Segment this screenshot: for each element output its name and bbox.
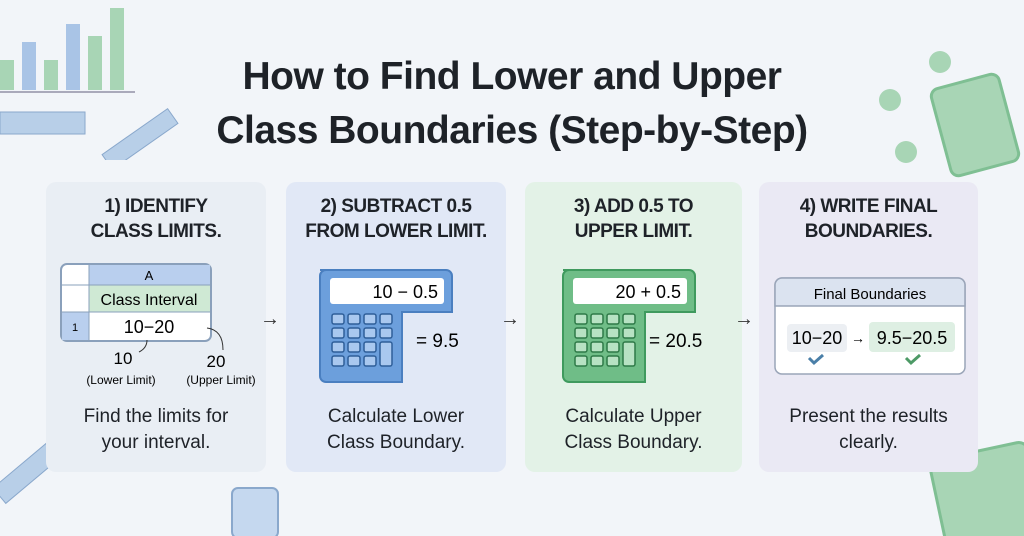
spreadsheet: class interval: Class Interval — [101, 292, 197, 309]
description step 4: Present the results — [789, 406, 948, 427]
calculator: 10 - 0.5: = 9.5 — [416, 331, 459, 352]
heading step 4 — [800, 196, 938, 242]
heading step 2: 2) SUBTRACT 0.5 — [321, 196, 471, 217]
spreadsheet: class interval: (Upper Limit) — [186, 373, 256, 387]
arrow 3: → — [734, 308, 754, 330]
final boundaries card — [774, 277, 966, 375]
heading step 4: 4) WRITE FINAL — [800, 196, 937, 217]
arrow 2: → — [500, 308, 520, 330]
decoration: bottom-left ruler and calculator — [0, 443, 279, 536]
calculator: 20 + 0.5 — [562, 269, 702, 383]
spreadsheet: class interval: 10−20 — [124, 317, 174, 337]
title: How to Find Lower and Upper — [242, 55, 781, 98]
calculator: 10 - 0.5: 10 − 0.5 — [372, 282, 438, 302]
heading step 2: FROM LOWER LIMIT. — [305, 221, 487, 242]
description step 2: Class Boundary. — [327, 432, 465, 453]
decoration: bar chart top-left — [0, 8, 135, 93]
final boundaries card: → — [851, 330, 865, 346]
final boundaries card: Final Boundaries — [814, 286, 926, 303]
panel: step 2 — [286, 182, 506, 472]
panel: step 3 — [525, 182, 742, 472]
description step 2 — [327, 406, 465, 453]
decoration: bottom-right calculator — [929, 441, 1024, 536]
heading step 1: 1) IDENTIFY — [104, 196, 208, 217]
spreadsheet: class interval: 10 — [114, 349, 132, 368]
decoration: calculator top-right — [879, 51, 1020, 178]
heading step 3 — [574, 196, 693, 242]
spreadsheet: class interval: A — [145, 268, 154, 283]
heading step 3: 3) ADD 0.5 TO — [574, 196, 693, 217]
heading step 2 — [305, 196, 487, 242]
heading step 1: CLASS LIMITS. — [91, 221, 221, 242]
description step 4 — [789, 406, 948, 453]
final boundaries card: 10−20 — [792, 328, 842, 348]
decoration: ruler top-left — [0, 108, 178, 160]
heading step 4: BOUNDARIES. — [805, 221, 932, 242]
description step 1 — [84, 406, 228, 453]
title — [216, 55, 808, 152]
spreadsheet: class interval: 20 — [207, 352, 225, 371]
spreadsheet: class interval: 1 — [72, 322, 78, 334]
description step 3: Class Boundary. — [564, 432, 702, 453]
arrow 1: → — [260, 308, 280, 330]
panel: step 1 — [46, 182, 266, 472]
panel: step 4 — [759, 182, 978, 472]
description step 3: Calculate Upper — [565, 406, 702, 427]
heading step 3: UPPER LIMIT. — [575, 221, 692, 242]
spreadsheet: class interval — [60, 263, 256, 387]
calculator: 20 + 0.5: = 20.5 — [649, 331, 702, 352]
calculator: 20 + 0.5: 20 + 0.5 — [615, 282, 681, 302]
final boundaries card: 9.5−20.5 — [877, 328, 947, 348]
title: Class Boundaries (Step-by-Step) — [216, 109, 808, 152]
description step 4: clearly. — [839, 432, 898, 453]
description step 1: your interval. — [102, 432, 210, 453]
description step 2: Calculate Lower — [328, 406, 464, 427]
description step 1: Find the limits for — [84, 406, 228, 427]
calculator: 10 - 0.5 — [319, 269, 459, 383]
description step 3 — [564, 406, 702, 453]
spreadsheet: class interval: (Lower Limit) — [86, 373, 156, 387]
heading step 1 — [91, 196, 221, 242]
